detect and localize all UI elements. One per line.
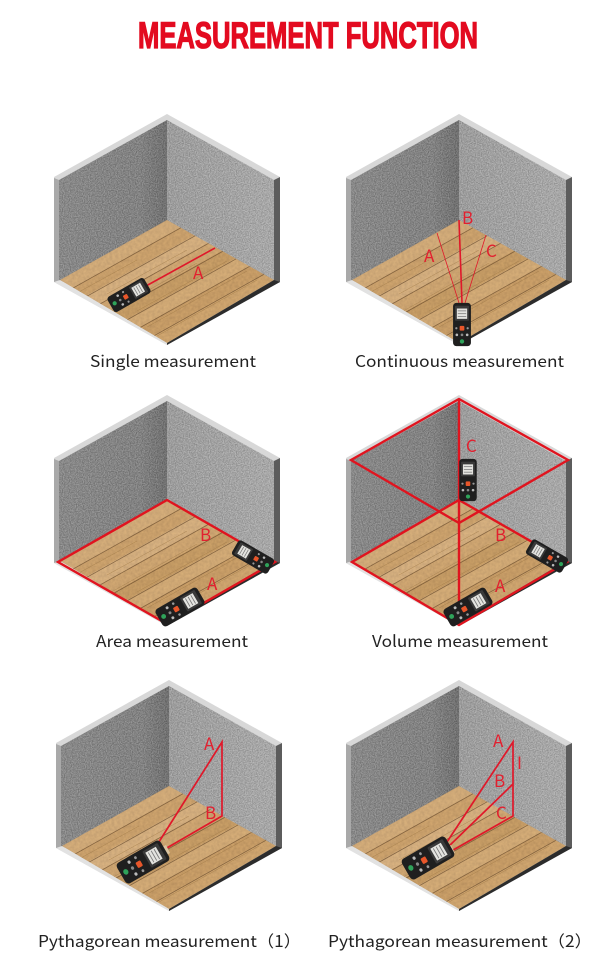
panel: continuous measurement <box>346 114 572 397</box>
device <box>400 835 456 881</box>
label I: I <box>517 749 522 774</box>
device A <box>442 586 494 628</box>
caption: Single measurement <box>90 348 256 372</box>
caption: Pythagorean measurement（1） <box>38 928 301 952</box>
label C: C <box>466 432 477 457</box>
device <box>106 277 152 313</box>
label C: C <box>496 799 507 824</box>
panel: single measurement <box>54 114 280 397</box>
laser lines <box>437 220 486 303</box>
caption: Continuous measurement <box>355 348 564 372</box>
panel: volume measurement <box>346 395 572 678</box>
label A: A <box>424 242 435 267</box>
device A <box>154 586 206 628</box>
label B: B <box>494 767 505 792</box>
label A: A <box>493 727 504 752</box>
device B <box>525 538 569 574</box>
device <box>453 303 471 346</box>
panel: pythagorean measurement 1 <box>38 680 301 960</box>
label B: B <box>200 521 211 546</box>
panel: pythagorean measurement 2 <box>328 680 592 960</box>
caption: Volume measurement <box>372 628 548 652</box>
label A: A <box>207 570 218 595</box>
label B: B <box>205 799 216 824</box>
label A: A <box>204 730 215 755</box>
label A: A <box>193 259 204 284</box>
device B <box>231 539 275 575</box>
laser line A <box>146 248 215 286</box>
label B: B <box>495 521 506 546</box>
floor outline <box>58 500 275 624</box>
device <box>115 839 171 885</box>
laser triangle <box>157 742 222 852</box>
label C: C <box>486 237 497 262</box>
laser lines <box>445 742 513 853</box>
label A: A <box>495 572 506 597</box>
panel: area measurement <box>54 395 280 678</box>
caption: Pythagorean measurement（2） <box>328 928 592 952</box>
device C <box>459 459 477 501</box>
volume outline <box>351 399 568 625</box>
label B: B <box>462 204 473 229</box>
caption: Area measurement <box>96 628 248 652</box>
